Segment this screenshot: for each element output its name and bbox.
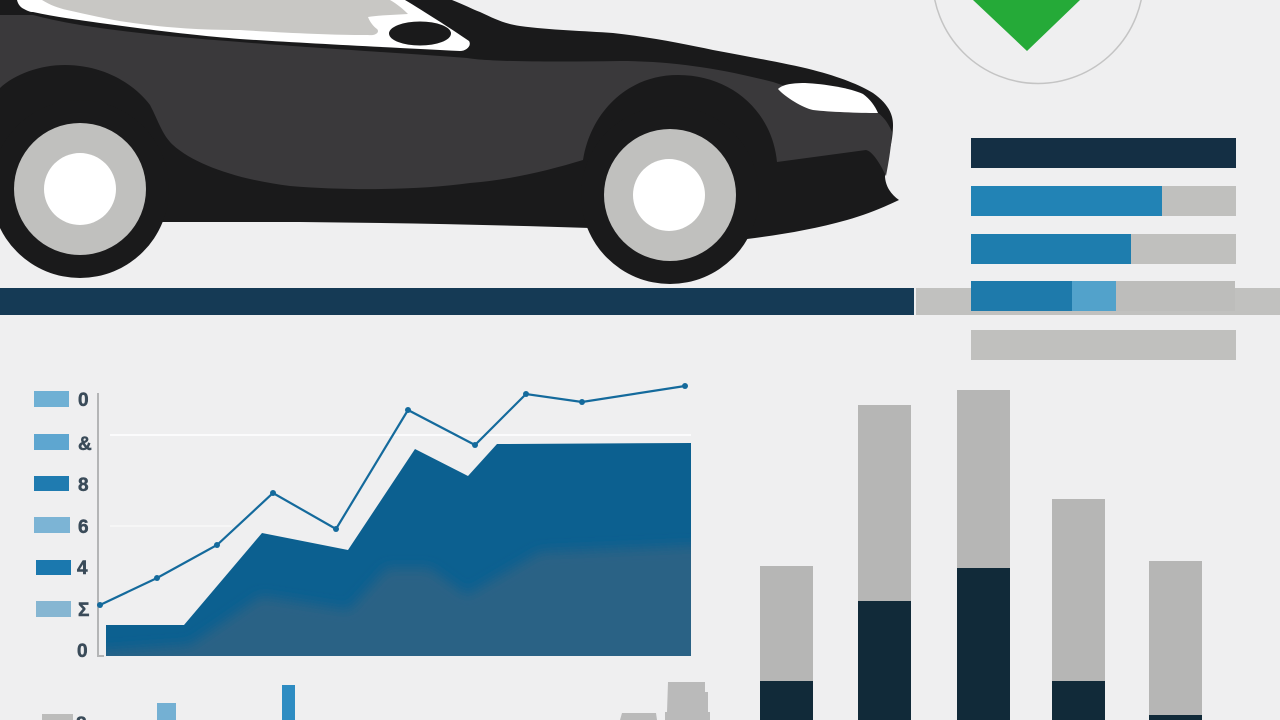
line series with markers xyxy=(97,383,688,608)
axis labels: 6 xyxy=(78,517,89,538)
headlight xyxy=(778,83,878,113)
bar row 1 xyxy=(971,186,1236,216)
bar row 2 xyxy=(971,234,1236,264)
car body silhouette xyxy=(0,0,899,239)
lower bar light blue xyxy=(157,703,176,720)
stacked bar 1 xyxy=(760,566,813,720)
chart: stacked bars xyxy=(760,390,1202,720)
lower swatch and label xyxy=(42,714,87,720)
lower bar grey small xyxy=(620,713,657,720)
icon: green check in circle xyxy=(932,0,1144,84)
grid lines xyxy=(110,435,691,526)
panel: horizontal bar list xyxy=(971,138,1236,360)
area series xyxy=(106,443,691,656)
side mirror xyxy=(389,22,451,46)
front wheel xyxy=(581,106,759,284)
stacked bar 5 xyxy=(1149,561,1202,720)
bar row 4 xyxy=(971,330,1236,360)
y axis xyxy=(98,393,104,656)
axis labels: 8 xyxy=(78,475,89,496)
bar row 3 xyxy=(971,281,1235,311)
illustration: sports car xyxy=(0,0,899,284)
lower area shade xyxy=(106,542,691,656)
legend swatches xyxy=(34,391,71,617)
stacked bar 2 xyxy=(858,405,911,720)
windshield and window frame xyxy=(17,0,470,51)
lower bar grey stepped xyxy=(665,682,710,720)
cropped lower chart row xyxy=(42,682,710,720)
car side panel xyxy=(0,15,892,189)
horizontal progress band xyxy=(0,288,1280,315)
chart: area and line chart xyxy=(34,383,710,675)
window glass xyxy=(42,0,408,35)
axis labels: Σ xyxy=(78,600,89,621)
lower bar blue xyxy=(282,685,295,720)
axis labels: 0 xyxy=(78,390,89,411)
rear wheel xyxy=(0,100,169,278)
axis labels: 0 xyxy=(77,641,88,662)
axis labels xyxy=(77,390,92,662)
header bar xyxy=(971,138,1236,168)
stacked bar 3 xyxy=(957,390,1010,720)
axis labels: 4 xyxy=(77,558,88,579)
axis labels: & xyxy=(78,434,92,455)
stacked bar 4 xyxy=(1052,499,1105,720)
